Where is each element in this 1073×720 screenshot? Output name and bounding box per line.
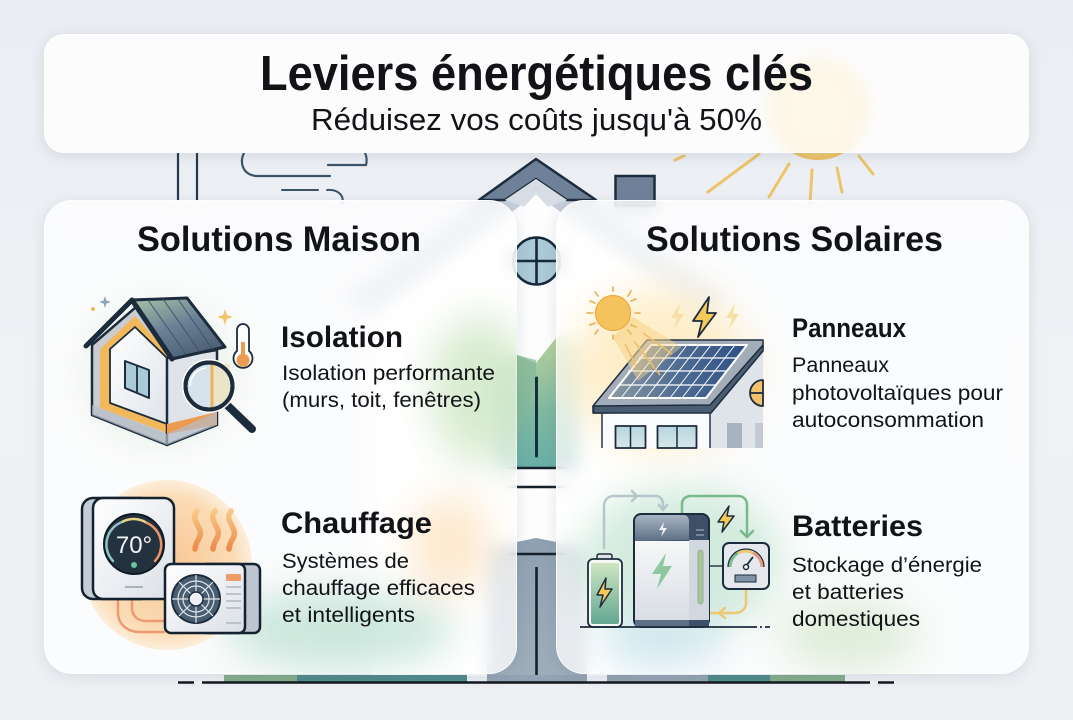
sun: [675, 58, 873, 205]
house wall: [370, 192, 700, 676]
sun: [586, 286, 640, 338]
label: Panneaux: Panneaux: [792, 354, 889, 376]
lightning bolts: [670, 296, 738, 336]
roof: [342, 159, 730, 316]
colour washes: [570, 290, 920, 670]
ground line: [580, 626, 770, 628]
icon: thermostat and heat pump: [82, 480, 260, 650]
energy flow arrows: [604, 490, 752, 618]
panel: Solutions Solaires: [556, 200, 1029, 674]
label: Panneaux: photovoltaïques pour: [792, 382, 1002, 404]
sun beam: [612, 316, 682, 380]
label: Chauffage: chauffage efficaces: [282, 576, 474, 600]
storage unit: [634, 514, 708, 626]
label: Isolation: [280, 320, 494, 412]
building: [602, 350, 762, 448]
round window: [513, 237, 560, 285]
header panel: [44, 34, 1029, 153]
label: Panneaux: [792, 312, 1002, 432]
battery: [588, 554, 622, 626]
roof: [592, 340, 762, 412]
label: Panneaux: Panneaux: [792, 312, 906, 342]
garden: [495, 337, 580, 487]
label: Chauffage: et intelligents: [282, 604, 414, 626]
label: Chauffage: Systèmes de: [282, 550, 408, 572]
sparkles: [90, 296, 232, 324]
icon: insulated house: [86, 296, 252, 444]
label: Isolation: Isolation performante: [282, 362, 494, 384]
thermometer: [233, 324, 252, 367]
heat pump unit: [164, 564, 260, 632]
ground line: [178, 681, 894, 684]
magnifier: [182, 358, 252, 428]
lightning bolt: [718, 506, 734, 532]
thermostat: 70°: [115, 532, 152, 558]
solar panel: [608, 344, 746, 398]
heading: Solutions Solaires: [646, 220, 942, 258]
wind lines: [178, 153, 367, 204]
icon: home battery system: [580, 490, 770, 626]
label: Chauffage: Chauffage: [280, 506, 432, 540]
chimney: [616, 176, 654, 206]
label: Batteries: Batteries: [792, 510, 922, 542]
thermostat: [82, 498, 174, 598]
heat waves: [194, 510, 234, 548]
label: Batteries: [792, 510, 982, 630]
door: [487, 538, 587, 682]
label: Chauffage: [280, 506, 474, 626]
label: Panneaux: autoconsommation: [792, 408, 984, 432]
panel: Solutions Maison: [44, 200, 517, 674]
gauge: [722, 542, 768, 588]
label: Batteries: et batteries: [792, 580, 904, 604]
icon: solar panels on a roof: [586, 286, 762, 448]
label: Batteries: Stockage d’énergie: [792, 554, 982, 576]
label: Isolation: (murs, toit, fenêtres): [282, 388, 480, 412]
ground strip: [224, 675, 845, 682]
subtitle: Réduisez vos coûts jusqu'à 50%: [310, 102, 762, 136]
label: Batteries: domestiques: [792, 608, 920, 630]
label: Isolation: Isolation: [280, 320, 402, 354]
colour washes: [90, 310, 530, 670]
title: Leviers énergétiques clés: [260, 46, 812, 100]
heading: Solutions Maison: [136, 220, 420, 258]
